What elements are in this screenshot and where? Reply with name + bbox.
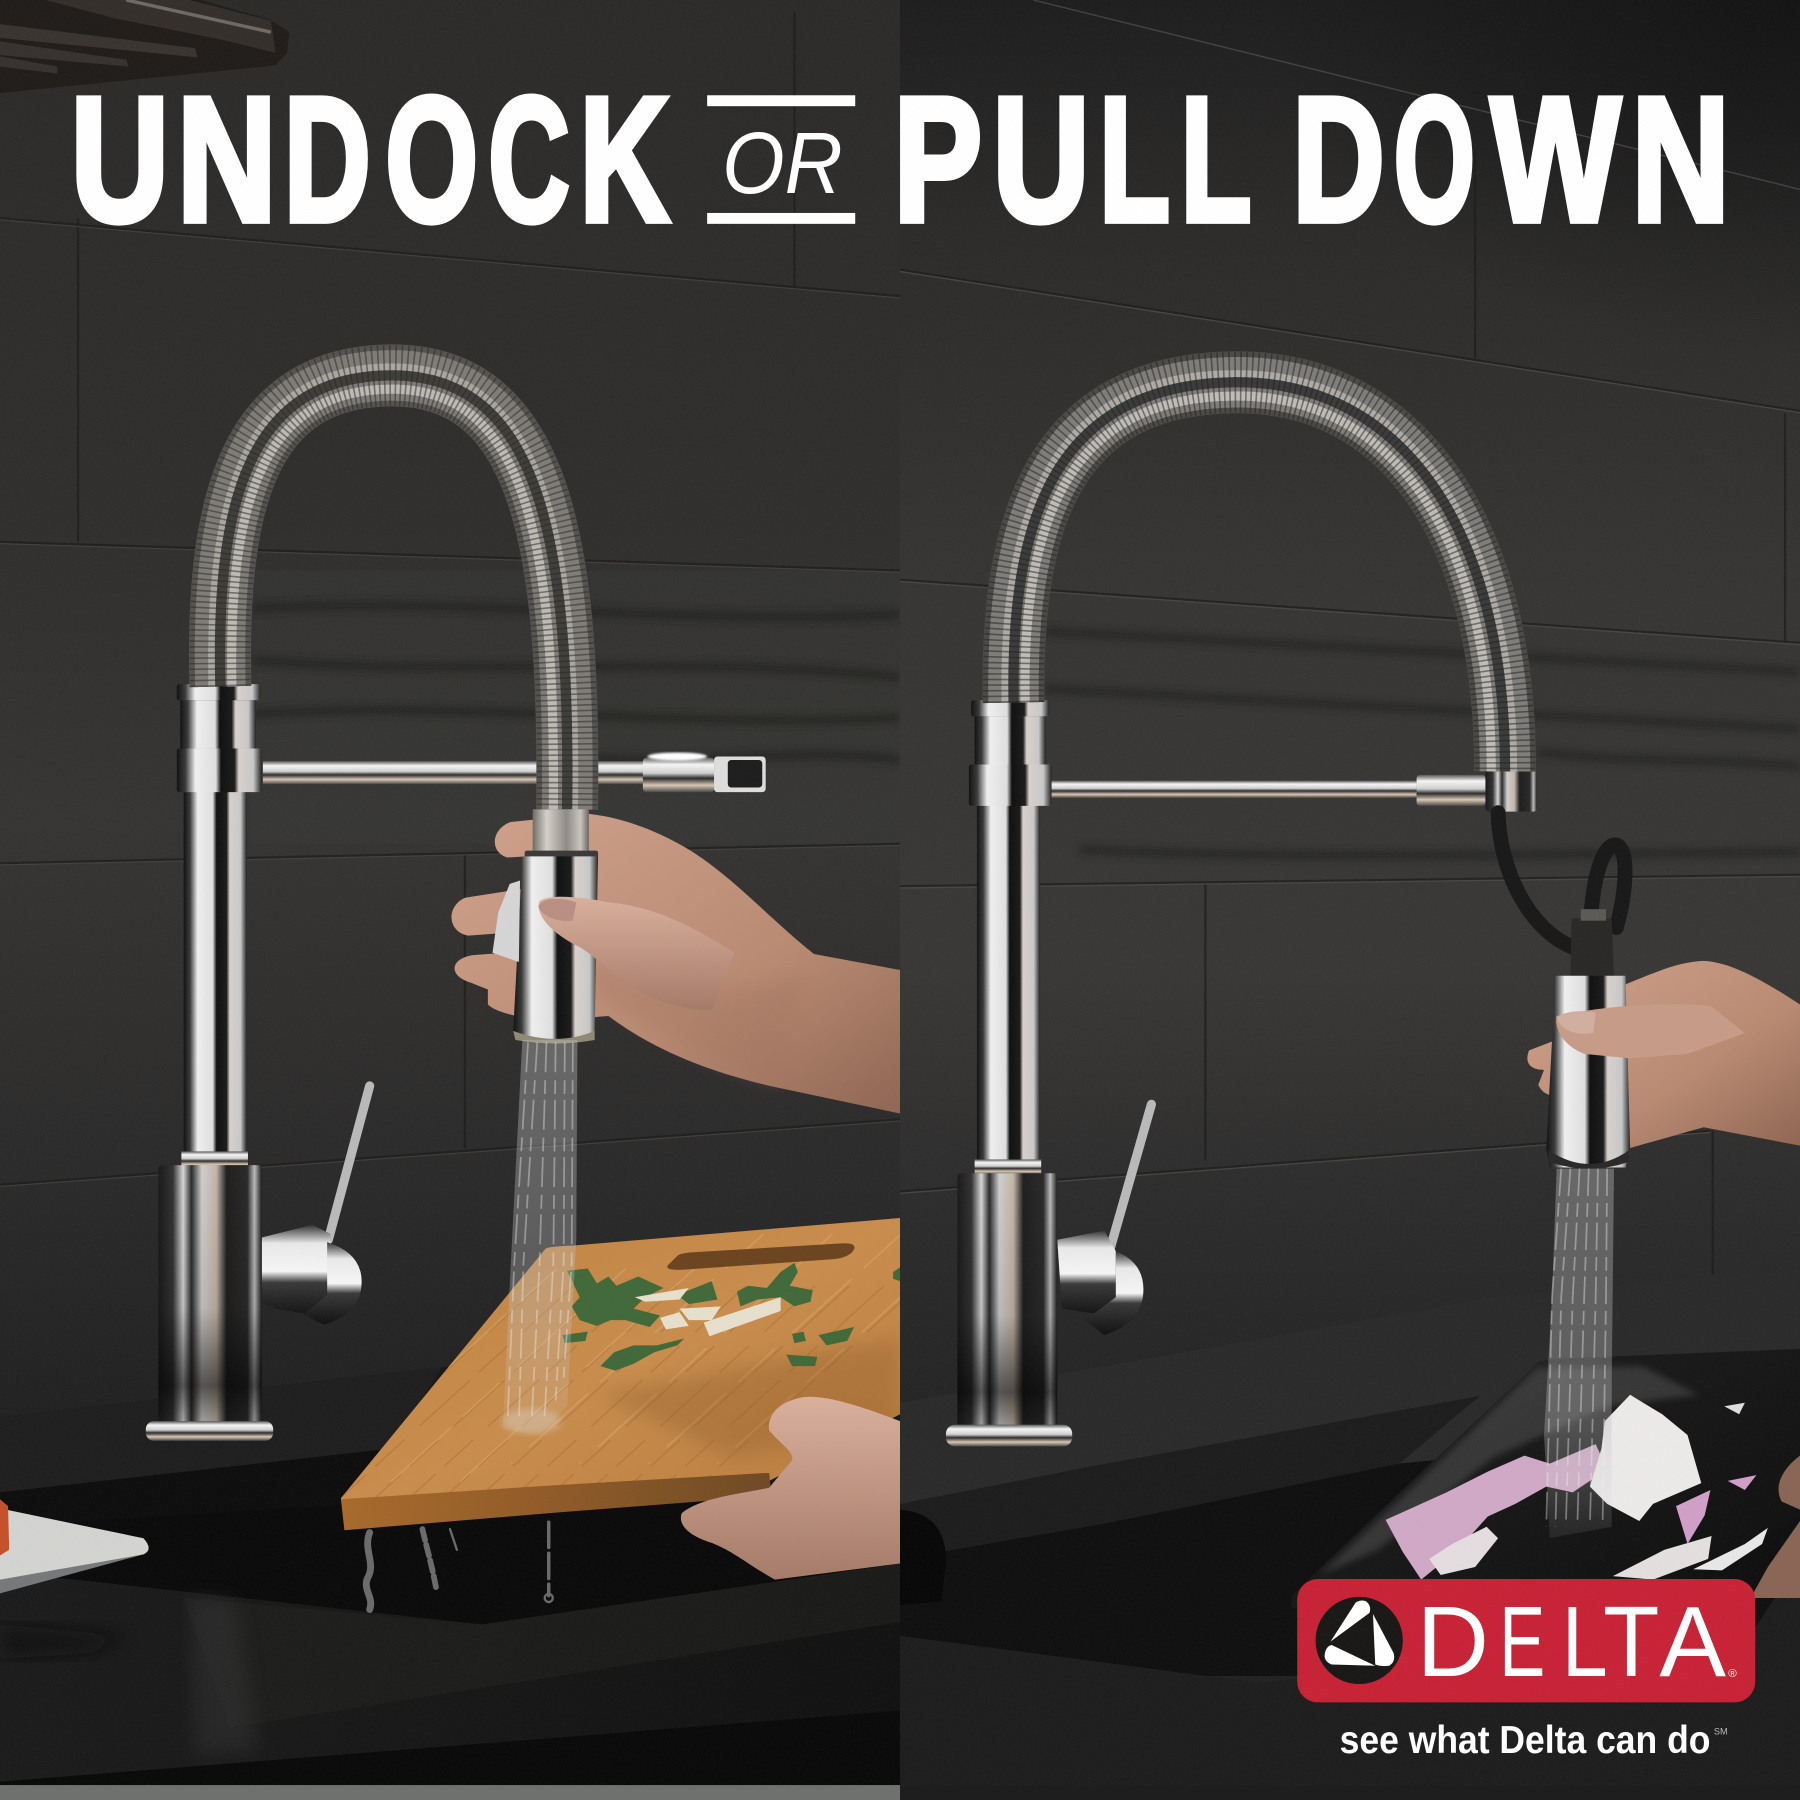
wordmark: L	[1562, 1587, 1608, 1698]
board front edge	[341, 1473, 771, 1530]
rail top left	[0, 0, 289, 93]
water stream right	[1544, 1169, 1614, 1538]
title word: pull: L	[1181, 61, 1251, 258]
title word: undock: K	[580, 61, 669, 258]
water stream left	[502, 1040, 577, 1435]
registered mark: ®	[1728, 1668, 1737, 1680]
swing arm right	[1052, 769, 1537, 812]
title word: pull: U	[993, 61, 1089, 258]
soap dispenser shadow	[900, 1510, 946, 1605]
title word: pull: P	[894, 61, 982, 258]
handle lever	[328, 1086, 370, 1240]
title word: down: W	[1491, 61, 1620, 258]
title word: down	[1292, 61, 1730, 258]
sprayer right	[1546, 909, 1630, 1169]
title divider: or	[707, 95, 855, 224]
panel: undock scene	[0, 0, 970, 1800]
thumb right	[1556, 1004, 1745, 1058]
water drips from board	[366, 1522, 553, 1609]
handle knob right	[1057, 1231, 1143, 1335]
panel: pull down scene	[900, 0, 1800, 1800]
spring hose left	[213, 368, 573, 809]
tagline: SM	[1714, 1727, 1728, 1737]
handle knob	[262, 1225, 362, 1325]
finger shadow strip	[589, 959, 804, 1085]
wordmark: E	[1499, 1587, 1545, 1698]
main faucet column left	[146, 790, 370, 1441]
thumb left	[538, 897, 735, 1010]
swing arm left	[263, 752, 766, 792]
Delta logo	[1297, 1579, 1755, 1702]
title	[71, 61, 1730, 258]
food remains on plate	[1386, 1395, 1768, 1580]
title word: pull: L	[1099, 61, 1170, 258]
black serving plate	[1291, 1349, 1800, 1630]
tile wall right	[900, 0, 1800, 1492]
title word: undock: U	[71, 61, 169, 258]
main faucet column right	[946, 804, 1151, 1446]
sprayer toggle	[492, 880, 520, 962]
upper countertop	[0, 1366, 900, 1522]
holding hand	[681, 1397, 900, 1580]
icon: Delta triangle mark	[1316, 1597, 1403, 1684]
title word: undock: C	[488, 61, 570, 258]
title word: pull	[894, 61, 1251, 258]
title word: undock: O	[385, 61, 478, 258]
plate	[0, 1499, 149, 1593]
wordmark: D	[1417, 1587, 1489, 1698]
collar right	[969, 700, 1052, 806]
herbs and garlic	[562, 1263, 900, 1371]
faucet base right	[957, 1173, 1057, 1430]
black braided hose	[1498, 813, 1625, 948]
title word: down: D	[1292, 61, 1385, 258]
sink basin	[58, 1501, 887, 1624]
title divider: or: OR	[722, 115, 843, 212]
faucet foot right	[946, 1425, 1072, 1446]
title word: down: O	[1394, 61, 1475, 258]
upper countertop right	[900, 1268, 1800, 1676]
lower countertop right	[900, 1561, 1800, 1800]
sprayer left	[492, 809, 598, 1043]
faucet base	[158, 1165, 262, 1425]
grey base strip	[0, 1785, 900, 1800]
back of hand left	[452, 814, 900, 1114]
spring hose right	[1007, 375, 1512, 771]
faucet foot	[146, 1421, 273, 1441]
wordmark	[1417, 1587, 1726, 1698]
handle lever right	[1110, 1104, 1151, 1249]
title word: down: N	[1632, 61, 1730, 258]
wordmark: A	[1659, 1587, 1726, 1698]
lower countertop	[0, 1564, 900, 1785]
tile wall left	[0, 0, 900, 1218]
back fingers right	[1527, 961, 1800, 1148]
tagline: see what Delta can do	[1340, 1719, 1710, 1762]
plate holding finger	[1751, 1456, 1800, 1598]
title word: undock: D	[284, 61, 371, 258]
title word: undock	[71, 61, 669, 258]
wordmark: T	[1603, 1587, 1659, 1698]
cutting board	[340, 1218, 900, 1530]
collar left	[177, 684, 262, 792]
title word: undock: N	[177, 61, 276, 258]
board handle slot	[667, 1243, 855, 1270]
